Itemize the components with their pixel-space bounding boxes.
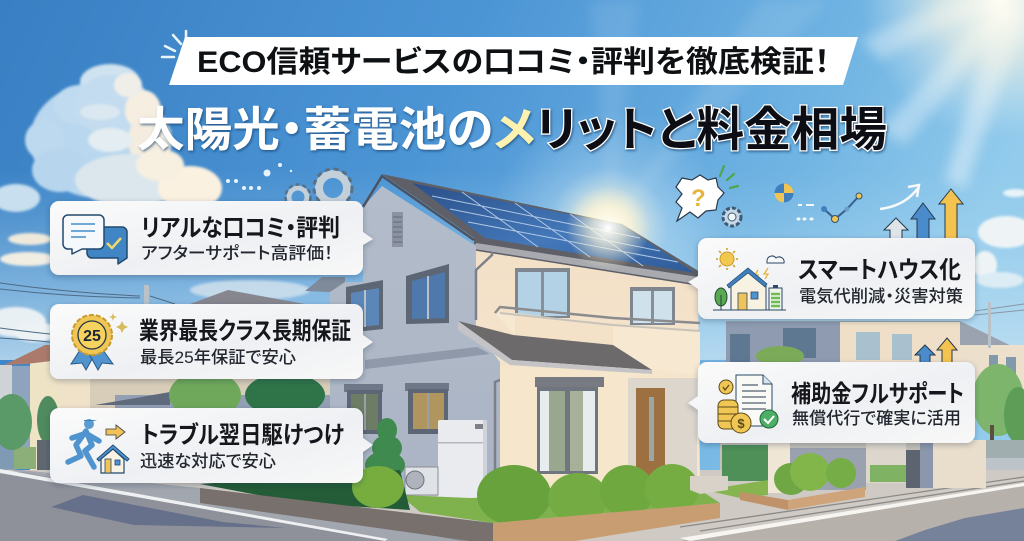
house bbox=[305, 174, 700, 498]
sun highlight on roof bbox=[566, 186, 650, 270]
card: long warranty bbox=[50, 304, 373, 379]
garden lawn and hedges bbox=[200, 464, 720, 525]
right gate and planter bbox=[705, 440, 986, 510]
icon: chat bubbles bbox=[63, 215, 127, 264]
background houses right bbox=[720, 302, 1024, 483]
card: smart house bbox=[688, 238, 975, 319]
solar panels bbox=[412, 183, 695, 273]
road bbox=[0, 468, 1024, 541]
response text: トラブル翌日駆けつけ bbox=[141, 421, 344, 449]
gable vent bbox=[392, 212, 403, 247]
icon: gears top left bbox=[286, 169, 352, 210]
review text: リアルな口コミ・評判 bbox=[141, 215, 340, 242]
lower front wall bbox=[500, 366, 700, 495]
icon: documents and coins bbox=[718, 375, 778, 433]
icon group: question and gear: ? bbox=[691, 185, 706, 212]
house: lower left eave bbox=[305, 277, 345, 292]
clouds left bbox=[0, 64, 222, 212]
card: next-day response: 迅速な対応で安心 bbox=[140, 452, 276, 471]
windows side upper bbox=[346, 264, 449, 333]
windows side lower bbox=[344, 383, 449, 434]
card: next-day response bbox=[50, 408, 373, 483]
icon group: growth arrows bbox=[884, 189, 963, 364]
sliding door bbox=[535, 377, 604, 474]
icon: sun, cloud, house, battery bbox=[713, 248, 786, 310]
downpipes bbox=[476, 252, 520, 495]
warranty text: 業界最長クラス長期保証 bbox=[139, 318, 351, 345]
icon: runner and house bbox=[68, 419, 129, 473]
windows front upper bbox=[515, 268, 675, 325]
background houses left bbox=[0, 283, 330, 475]
lower clouds left and right bbox=[0, 189, 1024, 342]
icon: 25 year medal bbox=[71, 313, 128, 370]
battery unit bbox=[438, 420, 487, 498]
entry door bbox=[636, 388, 665, 476]
air conditioner bbox=[405, 467, 438, 495]
brick planter bbox=[200, 488, 720, 541]
sun glow bbox=[488, 108, 728, 348]
icon: 25 year medal: 25 bbox=[83, 328, 101, 345]
banner text: ECO信頼サービスの口コミ・評判を徹底検証！ bbox=[197, 46, 830, 79]
small conifer bbox=[365, 418, 405, 479]
card: long warranty: 最長25年保証で安心 bbox=[140, 348, 296, 367]
house: main roof bbox=[382, 174, 700, 282]
subsidy text: 補助金フルサポート bbox=[791, 381, 964, 408]
icon: documents and coins: $ bbox=[737, 416, 745, 431]
decorative dots bbox=[226, 163, 292, 190]
smart house text: スマートハウス化 bbox=[798, 257, 961, 284]
card: subsidy support bbox=[688, 362, 975, 443]
card: real reviews bbox=[50, 201, 373, 275]
house: cream front wall bbox=[476, 244, 700, 495]
card: real reviews: アフターサポート高評価！ bbox=[141, 244, 333, 263]
balcony bbox=[495, 307, 700, 375]
front steps bbox=[690, 476, 728, 494]
card: subsidy support: 無償代行で確実に活用 bbox=[792, 409, 961, 428]
trees right bbox=[972, 364, 1024, 470]
icon group: pie and line chart bbox=[774, 184, 919, 222]
porch roof bbox=[458, 321, 652, 374]
icon group: question and gear bbox=[676, 166, 741, 226]
card: smart house: 電気代削減・災害対策 bbox=[799, 287, 963, 306]
top banner bbox=[162, 31, 858, 85]
house: gray side wall bbox=[330, 186, 500, 495]
trees left bbox=[0, 371, 325, 472]
entry recess bbox=[628, 378, 697, 490]
banner sparks bbox=[162, 31, 186, 57]
main title: 太陽光・蓄電池のメリットと料金相場 bbox=[137, 103, 887, 156]
side band bbox=[365, 347, 490, 369]
